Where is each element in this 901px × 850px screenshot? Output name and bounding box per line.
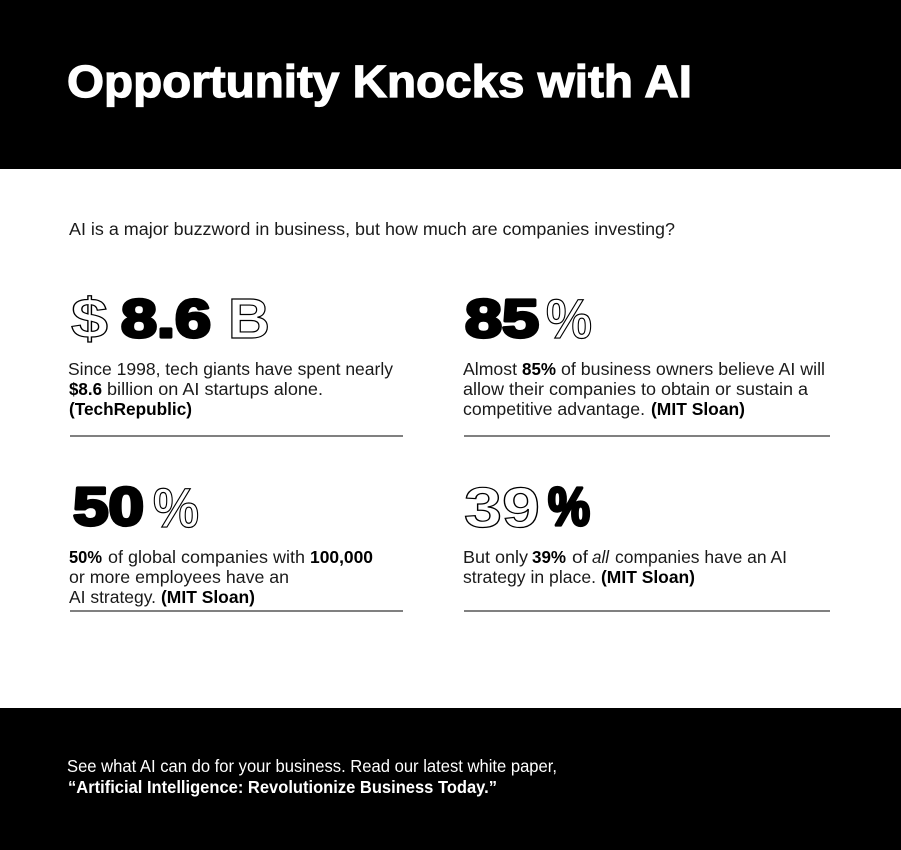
- panel: 50 percent stat: [69, 476, 403, 612]
- text block: AI strategy.: [69, 587, 156, 607]
- text block: all: [592, 547, 610, 567]
- text block: [68, 359, 393, 419]
- title: Opportunity Knocks with AI: [67, 56, 692, 107]
- footer text: [67, 756, 557, 797]
- big number: $8.6 B: B: [228, 287, 270, 351]
- text block: allow their companies to obtain or sustain a: [463, 379, 808, 399]
- big number: 85%: %: [546, 287, 592, 350]
- big number: $8.6 B: [71, 287, 270, 351]
- text block: (MIT Sloan): [601, 567, 695, 587]
- panel: 39 percent stat: [463, 476, 830, 612]
- big number: 85%: [465, 287, 592, 350]
- big number: 50%: [73, 476, 199, 539]
- text block: [69, 547, 373, 607]
- footer band: [0, 708, 901, 850]
- text block: companies have an AI: [615, 547, 787, 567]
- text block: But only: [463, 547, 528, 567]
- panel: 8.6 billion stat: [68, 287, 403, 437]
- header band: [0, 0, 901, 169]
- intro text: AI is a major buzzword in business, but how much are companies investing?: [69, 219, 675, 239]
- footer text: See what AI can do for your business. Read our latest white paper,: [67, 756, 557, 776]
- text block: (MIT Sloan): [651, 399, 745, 419]
- text block: of: [572, 547, 588, 567]
- text block: of business owners believe AI will: [561, 359, 825, 379]
- big number: $8.6 B: $: [71, 287, 108, 351]
- text block: (TechRepublic): [69, 399, 192, 419]
- text block: Since 1998, tech giants have spent nearly: [68, 359, 393, 379]
- big number: 39%: %: [548, 477, 590, 537]
- text block: [463, 547, 787, 587]
- text block: 85%: [522, 359, 556, 379]
- text block: 100,000: [310, 547, 373, 567]
- footer text: “Artificial Intelligence: Revolutionize Business Today.”: [68, 777, 497, 797]
- big number: 50%: 50: [73, 477, 144, 537]
- panel: 85 percent stat: [463, 287, 830, 437]
- text block: strategy in place.: [463, 567, 596, 587]
- big number: $8.6 B: 8.6: [121, 289, 211, 349]
- big number: 50%: %: [153, 476, 199, 539]
- text block: 50%: [69, 547, 102, 567]
- text block: $8.6: [69, 379, 102, 399]
- text block: of global companies with: [108, 547, 305, 567]
- big number: 39%: [464, 476, 590, 540]
- text block: [463, 359, 825, 419]
- text block: competitive advantage.: [463, 399, 645, 419]
- big number: 85%: 85: [465, 289, 539, 349]
- text block: or more employees have an: [69, 567, 289, 587]
- text block: billion on AI startups alone.: [107, 379, 323, 399]
- text block: (MIT Sloan): [161, 587, 255, 607]
- big number: 39%: 39: [464, 476, 540, 540]
- text block: 39%: [532, 547, 566, 567]
- text block: Almost: [463, 359, 517, 379]
